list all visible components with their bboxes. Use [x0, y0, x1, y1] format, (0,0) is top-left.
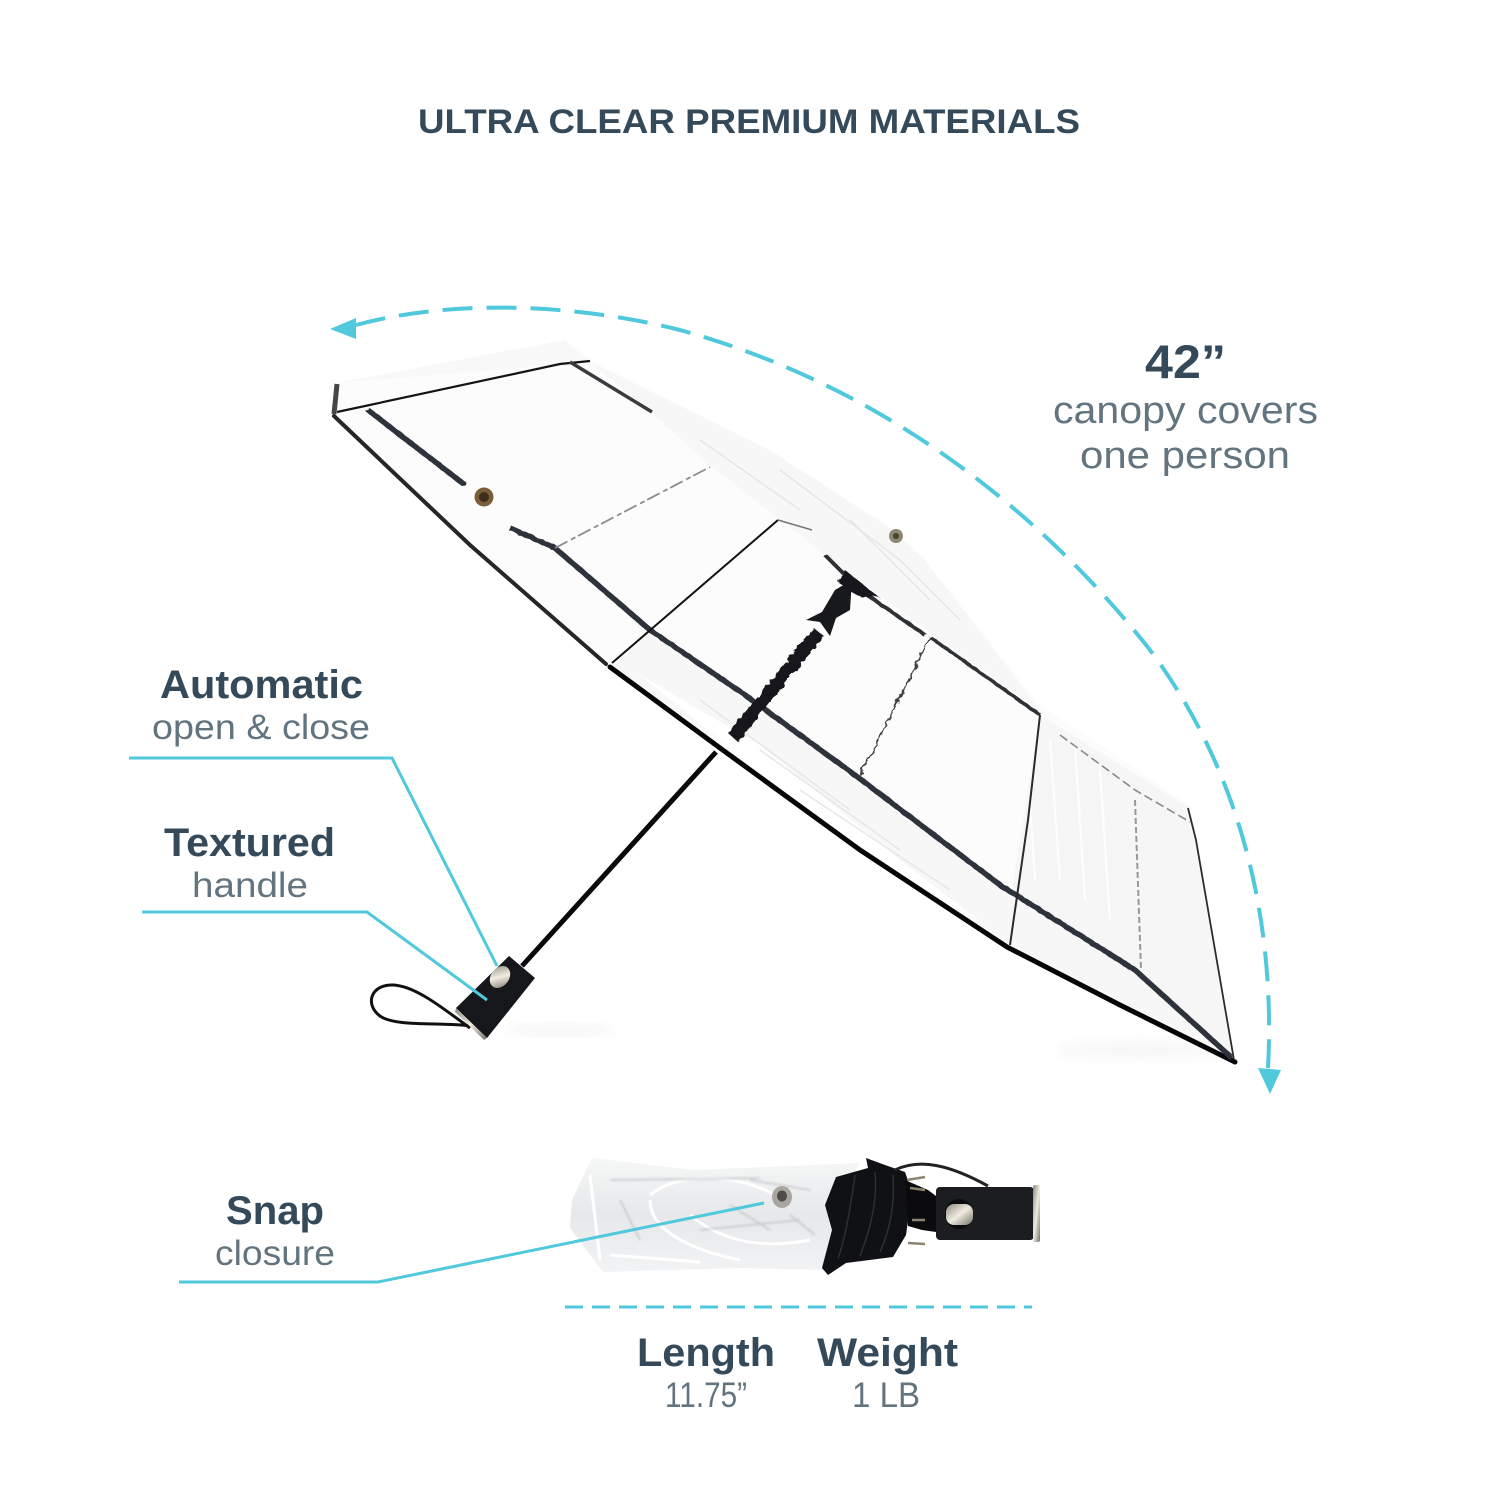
callout: textured: Textured	[164, 821, 335, 865]
open umbrella	[333, 340, 1236, 1062]
dashed arc arrow: canopy width	[330, 308, 1281, 1094]
spec: weight: 1 LB	[852, 1376, 920, 1415]
folded rib tips	[907, 1177, 925, 1244]
folded clear canopy	[570, 1158, 860, 1272]
spec: length: Length	[637, 1331, 775, 1375]
spec: length	[637, 1331, 775, 1415]
canopy seam band	[368, 410, 1232, 1058]
canopy size text	[1053, 335, 1318, 477]
umbrella snap buttons	[474, 488, 903, 543]
folded umbrella	[570, 1158, 1040, 1275]
canopy clear film	[333, 340, 1236, 1062]
callout: snap: closure	[215, 1234, 335, 1273]
folded strap	[895, 1164, 988, 1186]
canopy size text: one person	[1080, 435, 1290, 477]
canopy size text: 42”	[1145, 335, 1226, 388]
shaft	[522, 752, 716, 966]
callout: automatic: open & close	[152, 708, 370, 747]
canopy ribs	[334, 361, 1234, 1060]
callout: snap	[179, 1189, 764, 1282]
canopy hem black	[334, 416, 1235, 1062]
spec: length: 11.75”	[665, 1376, 747, 1415]
folded handle	[936, 1185, 1040, 1242]
callout: automatic	[129, 663, 497, 966]
spec: weight: Weight	[817, 1331, 958, 1375]
callout: textured: handle	[192, 866, 308, 905]
canopy size text: canopy covers	[1053, 390, 1318, 432]
ground shadows	[505, 1026, 1225, 1057]
callout: automatic: Automatic	[160, 663, 363, 707]
umbrella hub	[728, 570, 880, 742]
folded black canopy	[822, 1158, 936, 1275]
dimension dashed line	[565, 1306, 1032, 1308]
callout: textured	[142, 821, 487, 1000]
callout: snap: Snap	[226, 1189, 324, 1233]
title: ULTRA CLEAR PREMIUM MATERIALS	[418, 103, 1080, 141]
folded snap	[772, 1186, 792, 1208]
handle strap	[371, 985, 472, 1028]
handle	[455, 956, 535, 1040]
spec: weight	[817, 1331, 958, 1415]
